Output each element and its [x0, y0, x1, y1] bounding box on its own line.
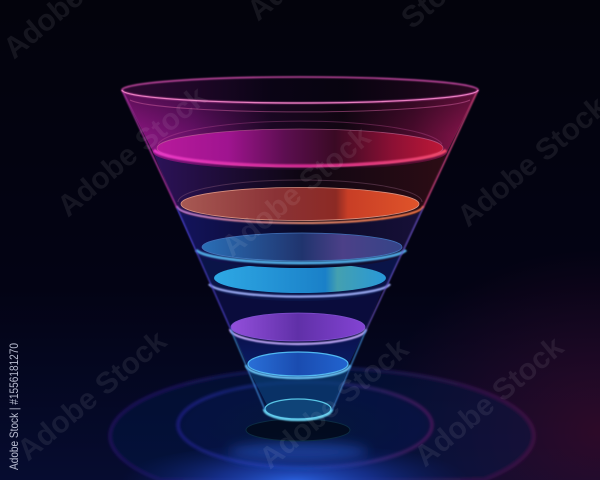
funnel side edges: [122, 90, 478, 410]
floor glow: [120, 444, 470, 480]
section 3: blue layer: [176, 208, 424, 268]
floor rings: [110, 368, 534, 480]
outer ring: [110, 368, 534, 480]
section 6: blue layer: [231, 328, 366, 379]
inner ring: [178, 382, 432, 468]
funnel: [122, 77, 478, 420]
watermark text: Adobe Stock: [408, 330, 570, 473]
watermark text: Adobe Stock: [215, 120, 377, 263]
watermark text: Adobe Stock: [253, 332, 415, 475]
light pool: [228, 442, 368, 462]
section 2: orange layer: [153, 152, 447, 224]
funnel shadow: [246, 419, 350, 441]
inner disc: [178, 382, 432, 468]
top rim: [122, 77, 478, 103]
watermark text: Adobe Stock: [51, 80, 213, 223]
section 1: magenta layer: [122, 77, 478, 170]
section 5: purple layer: [211, 284, 385, 344]
section 4: cyan layer: [196, 250, 403, 301]
watermark text: Adobe Stock: [11, 324, 173, 467]
section 7: bottom tip: [246, 364, 350, 420]
stock id label: Adobe Stock | #1556181270: [7, 343, 21, 470]
